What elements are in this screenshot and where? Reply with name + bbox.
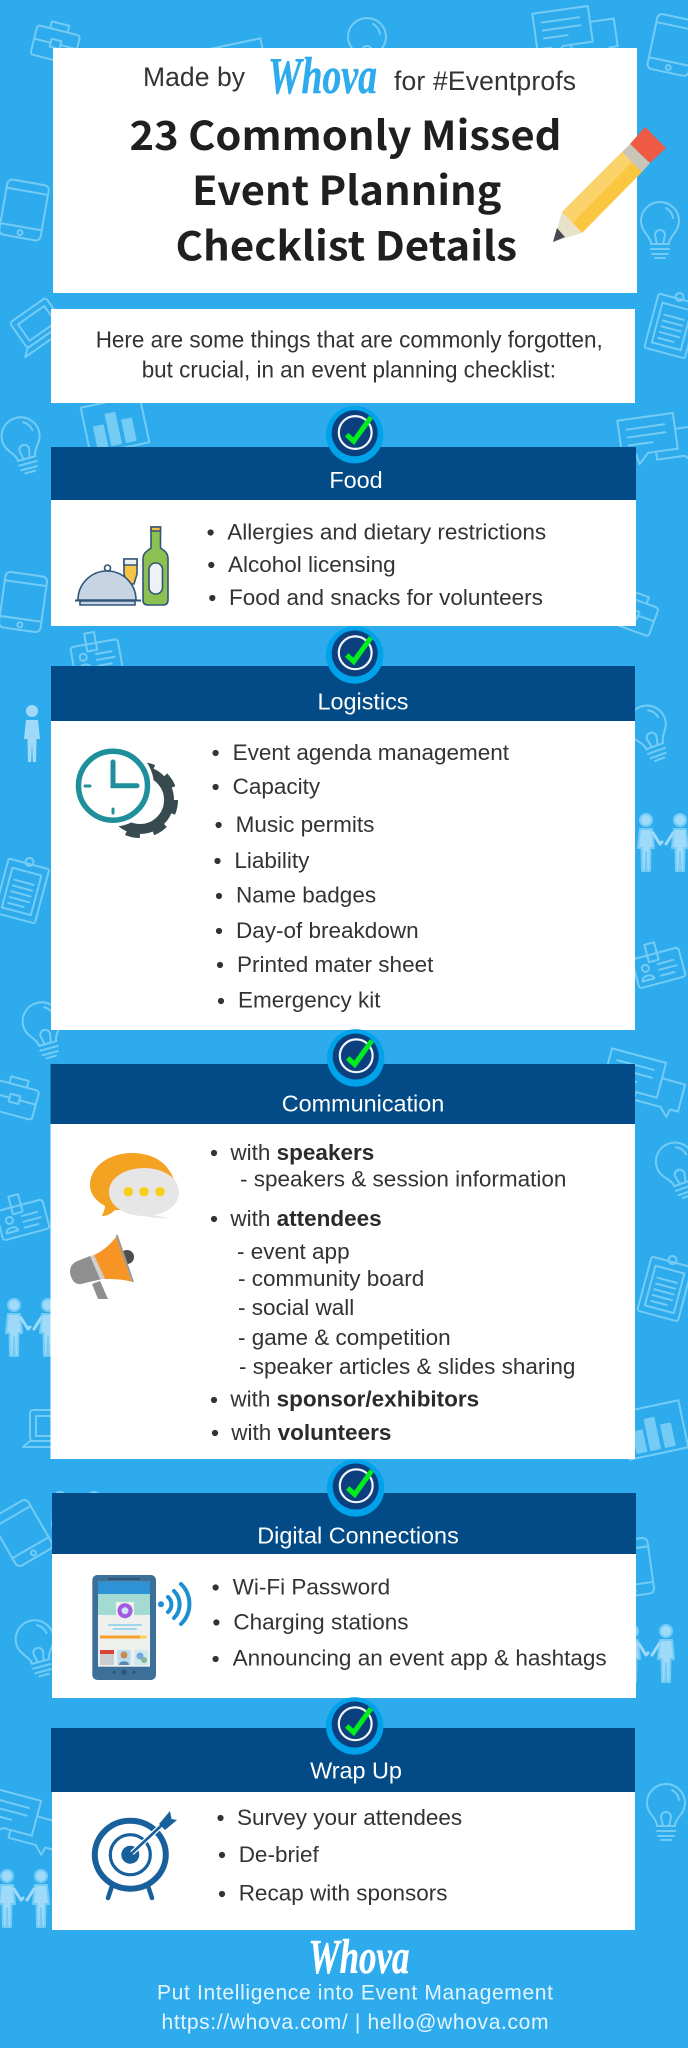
- list: communication: - social wall: [238, 1295, 354, 1320]
- list: communication: - speakers & session information: [240, 1167, 566, 1192]
- header: food: [51, 447, 636, 500]
- heading: [130, 104, 562, 272]
- list: food: Allergies and dietary restrictions: [227, 520, 546, 545]
- panel: food: [51, 447, 636, 626]
- text: tagline: Put Intelligence into Event Management: [157, 1982, 553, 2005]
- list: food: [208, 520, 546, 610]
- text: made by: Made by: [143, 62, 246, 92]
- header: digital connections: Digital Connections: [257, 1523, 459, 1549]
- list: communication: - event app: [237, 1239, 350, 1264]
- panel: title: [53, 48, 637, 293]
- heading: 23 Commonly Missed: [130, 104, 562, 162]
- header: communication: [50, 1064, 635, 1124]
- panel: logistics: [51, 666, 635, 1030]
- list: communication: with volunteers: [230, 1420, 391, 1445]
- icon: target: [95, 1811, 177, 1898]
- text: intro: but crucial, in an event planning checklist:: [142, 357, 556, 383]
- list: logistics: Printed mater sheet: [237, 952, 434, 977]
- badge: wrap up check: [326, 1697, 383, 1755]
- text: intro: Here are some things that are commonly forgotten,: [96, 326, 603, 352]
- footer: [157, 1929, 553, 2034]
- logo: Whova white: Whova: [308, 1929, 410, 1984]
- list: communication: - speaker articles & slides sharing: [239, 1354, 575, 1379]
- list: wrap up: De-brief: [239, 1842, 319, 1867]
- list: digital connections: Announcing an event app & hashtags: [233, 1646, 607, 1671]
- list: wrap up: [217, 1805, 462, 1906]
- header: wrap up: [51, 1728, 635, 1792]
- list: communication: [211, 1140, 575, 1445]
- list: communication: - community board: [238, 1266, 424, 1291]
- badge: logistics check: [326, 626, 383, 684]
- text: intro: [96, 326, 603, 383]
- panel: intro: [51, 309, 635, 403]
- badge: food check: [326, 406, 383, 463]
- list: logistics: [212, 740, 510, 1013]
- header: food: Food: [329, 467, 383, 493]
- text: contact: https://whova.com/ | hello@whova.com: [162, 2011, 548, 2034]
- list: logistics: Emergency kit: [238, 988, 381, 1013]
- list: logistics: Liability: [234, 848, 310, 873]
- heading: Event Planning: [192, 159, 502, 217]
- header: digital connections: [52, 1493, 636, 1554]
- list: communication: with attendees: [229, 1206, 382, 1231]
- list: food: Food and snacks for volunteers: [229, 585, 543, 610]
- panel: communication: [50, 1064, 635, 1459]
- header: wrap up: Wrap Up: [310, 1758, 402, 1784]
- icon: clock and gear: [72, 745, 175, 835]
- header: logistics: Logistics: [317, 688, 409, 714]
- panel: wrap up: [51, 1728, 635, 1930]
- list: communication: - game & competition: [238, 1325, 451, 1350]
- icon: phone with wifi: [92, 1575, 189, 1680]
- header: logistics: [51, 666, 635, 721]
- list: logistics: Music permits: [236, 812, 374, 837]
- list: wrap up: Survey your attendees: [237, 1805, 462, 1830]
- list: communication: with speakers: [229, 1140, 374, 1165]
- icon: megaphone: [70, 1235, 134, 1299]
- badge: digital check: [327, 1459, 384, 1517]
- list: logistics: Event agenda management: [233, 740, 510, 765]
- panel: digital connections: [52, 1493, 636, 1698]
- list: wrap up: Recap with sponsors: [239, 1881, 448, 1906]
- icon: food and drink: [75, 527, 168, 605]
- header: communication: Communication: [282, 1091, 444, 1117]
- list: logistics: Name badges: [236, 883, 376, 908]
- list: logistics: Capacity: [233, 774, 321, 799]
- list: digital connections: [212, 1575, 607, 1671]
- icon: speech bubbles: [90, 1153, 179, 1218]
- text: for Eventprofs: for #Eventprofs: [394, 66, 576, 96]
- heading: Checklist Details: [176, 214, 517, 272]
- badge: communication check: [327, 1029, 384, 1087]
- icon: pencil: [553, 127, 666, 242]
- list: food: Alcohol licensing: [228, 552, 396, 577]
- logo: Whova: Whova: [268, 48, 377, 105]
- list: digital connections: Wi-Fi Password: [233, 1575, 390, 1600]
- list: digital connections: Charging stations: [233, 1610, 409, 1635]
- list: communication: with sponsor/exhibitors: [229, 1387, 479, 1412]
- list: logistics: Day-of breakdown: [236, 918, 419, 943]
